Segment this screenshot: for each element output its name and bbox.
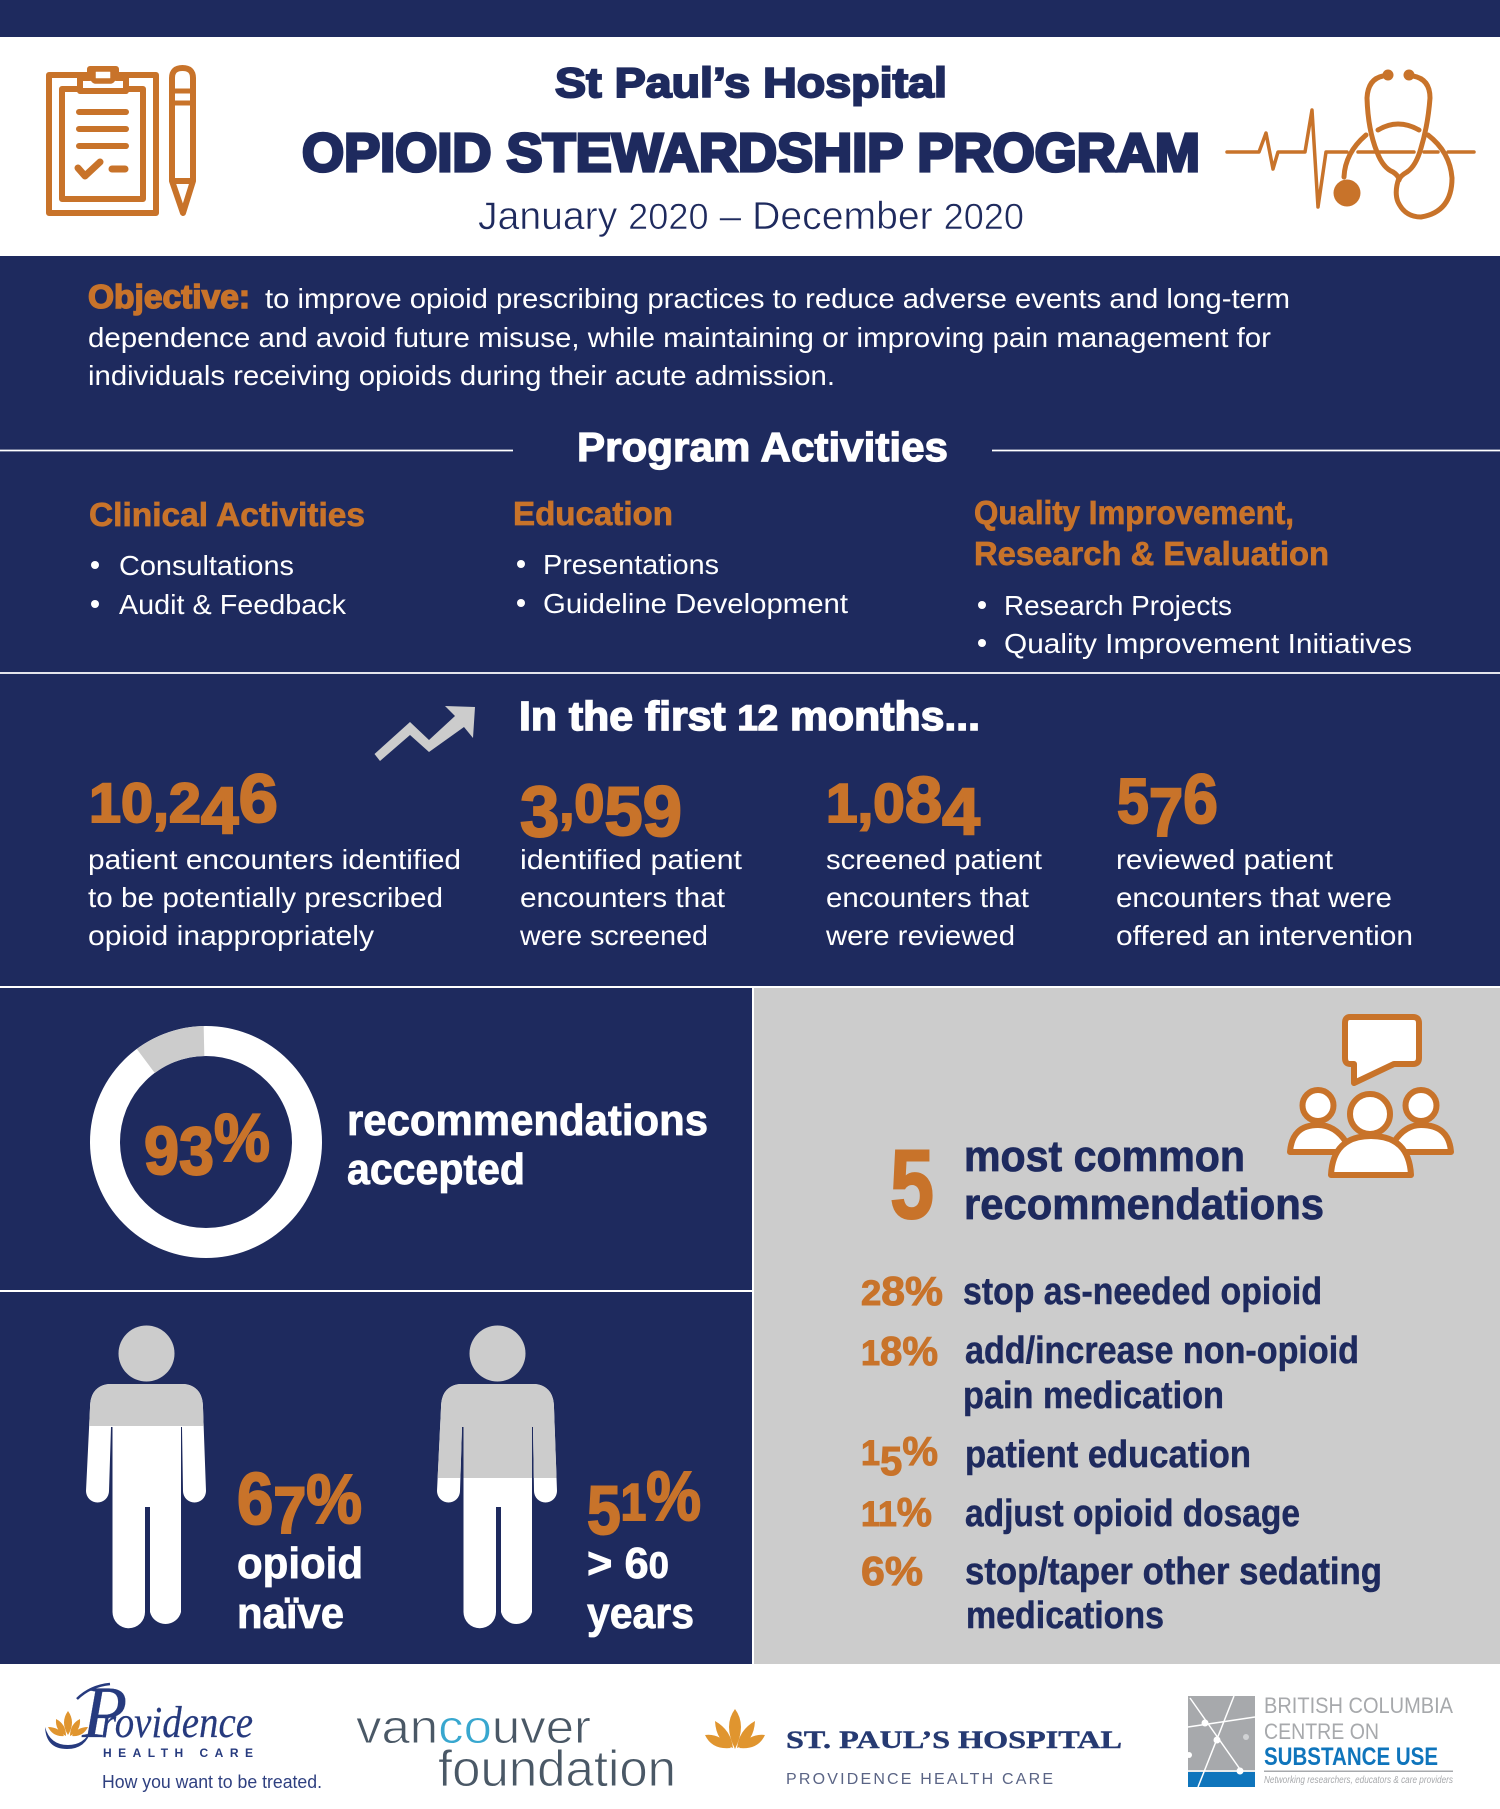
stat: 3,059: were screened <box>519 920 708 951</box>
stat: 576: 5 <box>1117 765 1153 837</box>
list: recommendation labels: add/increase non-opioid <box>965 1330 1359 1372</box>
objective label: Objective: <box>88 278 250 315</box>
objective text: individuals receiving opioids during their acute admission. <box>88 360 835 391</box>
stat: 67% opioid naive: naïve <box>237 1589 344 1638</box>
big number 5: 5 <box>890 1129 934 1239</box>
heading: program activities: Program Activities <box>577 424 948 470</box>
panel: first 12 months <box>88 693 1413 951</box>
stat: 10,246: 6 <box>239 760 278 837</box>
column: clinical activities: Consultations <box>119 550 294 581</box>
logo: providence health care: How you want to be treated. <box>102 1772 322 1792</box>
value: 93%: % <box>214 1100 270 1176</box>
heading: most common recommendations: recommendations <box>964 1180 1324 1229</box>
stat: 10,246: 4 <box>201 773 239 847</box>
icon: stethoscope and heartbeat <box>1227 70 1474 217</box>
icon: trending arrow <box>374 706 475 761</box>
stat: 1,084 <box>825 763 1042 951</box>
heading: in the first 12 months: In the first 12 months... <box>519 693 980 739</box>
column: quality improvement: Research & Evaluation <box>974 535 1329 572</box>
stat: 1,084: screened patient <box>826 844 1042 875</box>
column: quality improvement: Quality Improvement, <box>974 494 1294 531</box>
logo: vancouver foundation <box>356 1700 676 1797</box>
column: clinical activities: Clinical Activities <box>89 496 365 533</box>
value: 93%: 93 <box>144 1113 220 1189</box>
stat: 51% over 60 years: 1 <box>621 1474 646 1532</box>
list: recommendation percentages: 28% <box>861 1268 943 1314</box>
stat: 1,084: 4 <box>942 774 980 848</box>
footer logos <box>45 1672 1453 1797</box>
objective text: dependence and avoid future misuse, while maintaining or improving pain management for <box>88 322 1271 353</box>
heading: most common recommendations <box>964 1132 1324 1229</box>
icon: people with speech bubble <box>1290 1017 1451 1175</box>
label: recommendations accepted <box>347 1096 708 1194</box>
column: education: Education <box>513 495 673 532</box>
list: recommendation labels: adjust opioid dosage <box>965 1493 1300 1535</box>
column: education: Guideline Development <box>543 588 848 619</box>
list: recommendation percentages: 5 <box>880 1438 902 1484</box>
stat: 10,246: to be potentially prescribed <box>88 882 443 913</box>
icon: person 67% <box>86 1326 206 1628</box>
header <box>49 59 1474 238</box>
logo: providence health care: HEALTH CARE <box>103 1746 253 1760</box>
rule lines beside program activities <box>0 450 1500 673</box>
objective <box>88 278 1290 391</box>
title: program name: OPIOID STEWARDSHIP PROGRAM <box>302 123 1200 183</box>
stat: 1,084: were reviewed <box>825 920 1015 951</box>
stat: 10,246: 10,2 <box>89 771 198 834</box>
logo: vancouver foundation: vancouver <box>356 1700 591 1753</box>
date range: January 2020 – December 2020 <box>478 195 1024 238</box>
label: recommendations accepted: accepted <box>347 1145 525 1194</box>
logo: bc centre on substance use: Networking researchers, educators & care providers <box>1264 1775 1453 1786</box>
logo: bc centre on substance use <box>1186 1693 1453 1787</box>
stat: 51% over 60 years: years <box>587 1589 694 1638</box>
list: recommendation labels <box>963 1271 1382 1637</box>
stat: 67% opioid naive: 7 <box>273 1473 306 1547</box>
donut chart: 93% <box>105 1041 307 1243</box>
label: recommendations accepted: recommendations <box>347 1096 708 1145</box>
logo: bc centre on substance use: CENTRE ON <box>1264 1719 1379 1744</box>
column: quality improvement: Quality Improvement Initiatives <box>1004 628 1412 659</box>
list: recommendation labels: stop as-needed opioid <box>963 1271 1322 1313</box>
list: recommendation percentages: 11% <box>861 1489 932 1535</box>
list: recommendation percentages: 1 <box>861 1434 880 1473</box>
panel: program activities <box>89 424 1412 659</box>
stat: 3,059: ,0 <box>559 774 604 834</box>
stat: 3,059: 9 <box>643 773 682 852</box>
list: recommendation percentages: % <box>902 1428 938 1474</box>
logo: bc centre on substance use: BRITISH COLUMBIA <box>1264 1693 1453 1718</box>
list: recommendation labels: patient education <box>965 1434 1251 1476</box>
stat: 3,059: identified patient <box>520 844 742 875</box>
stat: 51% over 60 years: 5 <box>587 1472 625 1549</box>
stat: 10,246 <box>88 760 461 951</box>
stat: 3,059: 5 <box>604 773 643 850</box>
stat: 3,059: 3 <box>520 773 560 852</box>
objective text: to improve opioid prescribing practices to reduce adverse events and long-term <box>265 283 1290 314</box>
list: recommendation percentages: 18% <box>861 1328 938 1374</box>
logo: st paul's hospital <box>705 1709 1122 1788</box>
stat: 51% over 60 years: % <box>646 1457 701 1535</box>
column: clinical activities <box>89 496 365 620</box>
heading: most common recommendations: most common <box>964 1132 1245 1181</box>
navy body panel <box>0 256 1500 986</box>
stat: 1,084: encounters that <box>826 882 1029 913</box>
stat: 576: 6 <box>1183 760 1218 838</box>
stat: 67% opioid naive: % <box>306 1460 362 1538</box>
column: education: Presentations <box>543 549 719 580</box>
top band <box>0 0 1500 37</box>
column: quality improvement: Research Projects <box>1004 590 1232 621</box>
logo: providence health care: P <box>81 1672 127 1754</box>
stat: 576: 7 <box>1149 774 1183 851</box>
stat: 10,246: opioid inappropriately <box>88 920 374 951</box>
logo: vancouver foundation: foundation <box>438 1740 676 1797</box>
list: recommendation percentages <box>861 1268 943 1594</box>
logo: bc centre on substance use: SUBSTANCE USE <box>1264 1743 1438 1771</box>
panel: recommendations accepted <box>0 988 752 1290</box>
stat: 67% opioid naive: opioid <box>237 1539 363 1588</box>
stat: 1,084: 1,08 <box>826 763 941 836</box>
column: quality improvement <box>974 494 1412 659</box>
stat: 576: reviewed patient <box>1116 844 1333 875</box>
column: clinical activities: Audit & Feedback <box>119 589 347 620</box>
logo: st paul's hospital: ST. PAUL’S HOSPITAL <box>786 1727 1122 1754</box>
stat: 576 <box>1116 760 1413 951</box>
list: recommendation labels: pain medication <box>963 1375 1224 1417</box>
list: recommendation labels: stop/taper other sedating <box>965 1551 1382 1593</box>
logo: st paul's hospital: PROVIDENCE HEALTH CARE <box>786 1771 1053 1788</box>
stat: 51% over 60 years: > 60 <box>587 1539 669 1588</box>
stat: 51% over 60 years <box>587 1457 701 1638</box>
stat: 576: encounters that were <box>1116 882 1392 913</box>
icon: person 51% <box>437 1326 557 1628</box>
stat: 67% opioid naive: 6 <box>237 1459 278 1540</box>
stat: 3,059 <box>519 773 742 951</box>
logo: providence health care: rovidence <box>101 1698 253 1747</box>
stat: 576: offered an intervention <box>1116 920 1413 951</box>
stat: 67% opioid naive <box>237 1459 363 1638</box>
title: hospital name: St Paul’s Hospital <box>555 59 947 106</box>
column: education <box>513 495 848 619</box>
panel: patient demographics <box>0 1292 752 1664</box>
stat: 3,059: encounters that <box>520 882 725 913</box>
stat: 10,246: patient encounters identified <box>88 844 461 875</box>
panel: most common recommendations <box>754 988 1500 1664</box>
logo: providence health care <box>45 1672 322 1792</box>
objective text <box>88 283 1290 391</box>
list: recommendation percentages: 6% <box>861 1548 923 1594</box>
list: recommendation labels: medications <box>966 1595 1164 1637</box>
icon: clipboard and pencil <box>49 68 193 213</box>
